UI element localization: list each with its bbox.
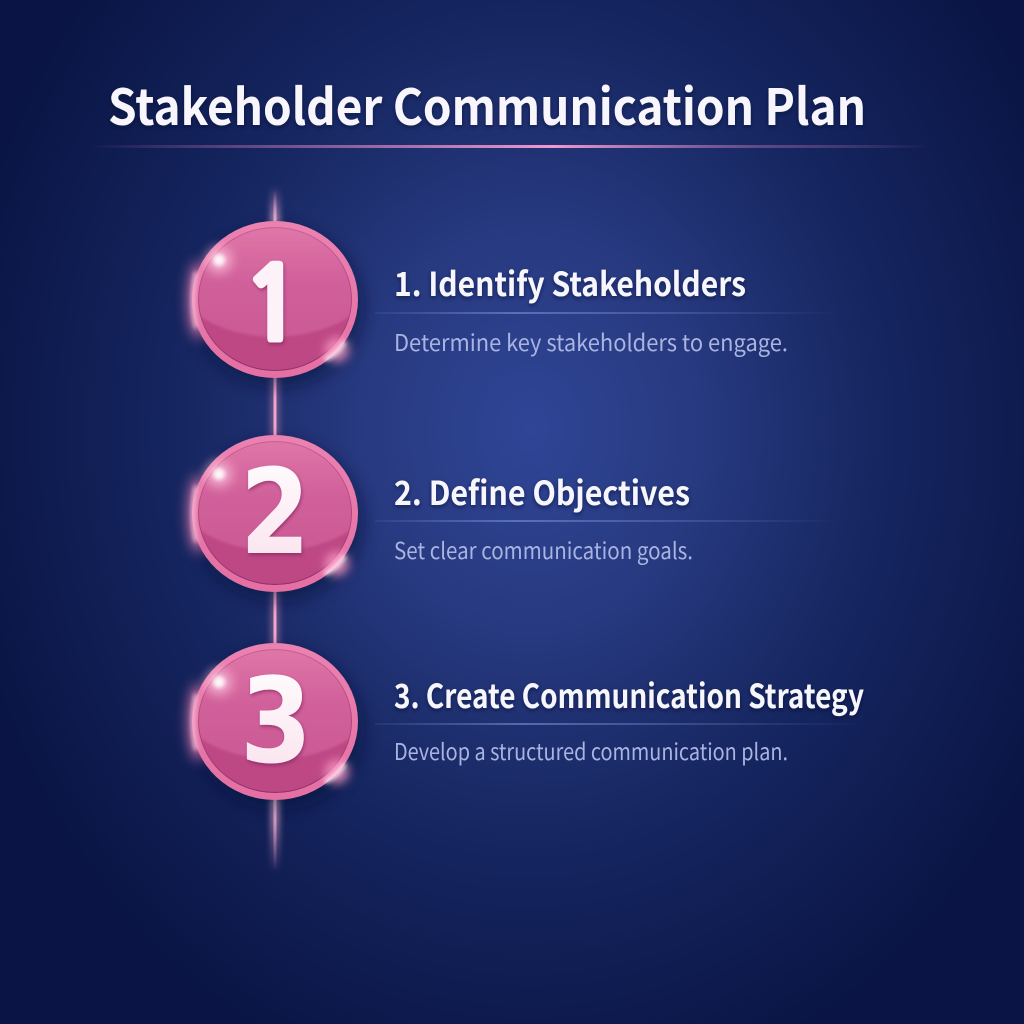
step 2 text [375, 467, 840, 566]
step 1 description: Determine key stakeholders to engage. [394, 324, 788, 358]
step 2 heading: 2. Define Objectives [394, 467, 690, 515]
badge 1 [178, 216, 369, 398]
numeral 2: 2 [240, 443, 310, 581]
title underline [90, 145, 930, 148]
step 3 text [375, 670, 865, 767]
step 3 description: Develop a structured communication plan. [394, 733, 788, 767]
numeral 3: 3 [240, 652, 312, 790]
numeral 1: 1 [242, 256, 304, 356]
step 2 description: Set clear communication goals. [394, 532, 693, 566]
step 1 text [375, 258, 840, 358]
badge 3 [178, 638, 368, 820]
step 1 heading: 1. Identify Stakeholders [394, 258, 746, 306]
title: Stakeholder Communication Plan [108, 68, 866, 140]
badge 2 [178, 430, 369, 612]
timeline connectors [270, 186, 280, 874]
step 3 heading: 3. Create Communication Strategy [394, 670, 864, 718]
